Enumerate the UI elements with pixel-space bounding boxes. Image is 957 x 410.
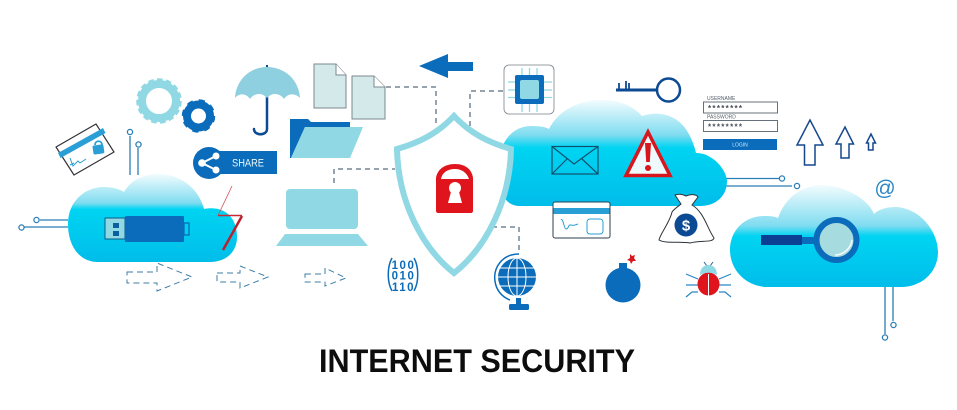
shield (397, 116, 511, 273)
login form: ******** (708, 122, 743, 132)
icon: binary code: 100 (392, 260, 415, 272)
icon: warning triangle (626, 132, 670, 176)
login form (703, 96, 778, 150)
icon: magnifying glass (761, 220, 856, 260)
icon: light gear (138, 80, 180, 122)
icon: dark gear (184, 101, 214, 131)
right cloud (730, 185, 938, 287)
icon: folder (290, 119, 363, 158)
icon: credit card with lock (56, 124, 114, 175)
centre cloud (498, 100, 727, 206)
icon: bug (686, 262, 731, 297)
dashed arrows (127, 263, 346, 291)
login form: PASSWORD (707, 114, 736, 120)
icon: money bag: $ (682, 218, 691, 234)
icon: signature card (553, 202, 610, 238)
icon: binary code (388, 258, 418, 294)
icon: left arrow (419, 54, 473, 78)
icon: broken cloud crack (218, 186, 242, 250)
icon: binary code: 010 (392, 270, 415, 282)
icon: document two (352, 76, 385, 119)
centre cloud connectors (725, 176, 800, 189)
icon: key (616, 78, 680, 102)
icon: red padlock (436, 164, 473, 213)
icon: envelope (552, 146, 598, 174)
icon: microchip (504, 65, 554, 114)
icon: usb drive (105, 216, 189, 242)
icon: share badge: SHARE (232, 158, 264, 170)
icon: at sign: @ (874, 177, 896, 200)
icon: laptop (276, 189, 368, 246)
icon: up arrows (797, 120, 876, 165)
icon: money bag (659, 194, 714, 243)
left cloud (68, 174, 237, 262)
icon: document one (314, 64, 346, 108)
icon: share badge (193, 147, 277, 179)
title: INTERNET SECURITY (319, 343, 635, 379)
right cloud connectors (882, 286, 896, 340)
icon: globe (495, 254, 536, 310)
icon: binary code: 110 (392, 282, 415, 294)
icon: bomb (606, 254, 640, 302)
login form: LOGIN (732, 142, 748, 148)
left cloud connectors (19, 129, 141, 230)
icon: umbrella (235, 65, 300, 134)
login form: USERNAME (707, 96, 736, 102)
dashed connectors (334, 87, 552, 254)
login form: ******** (708, 104, 743, 113)
